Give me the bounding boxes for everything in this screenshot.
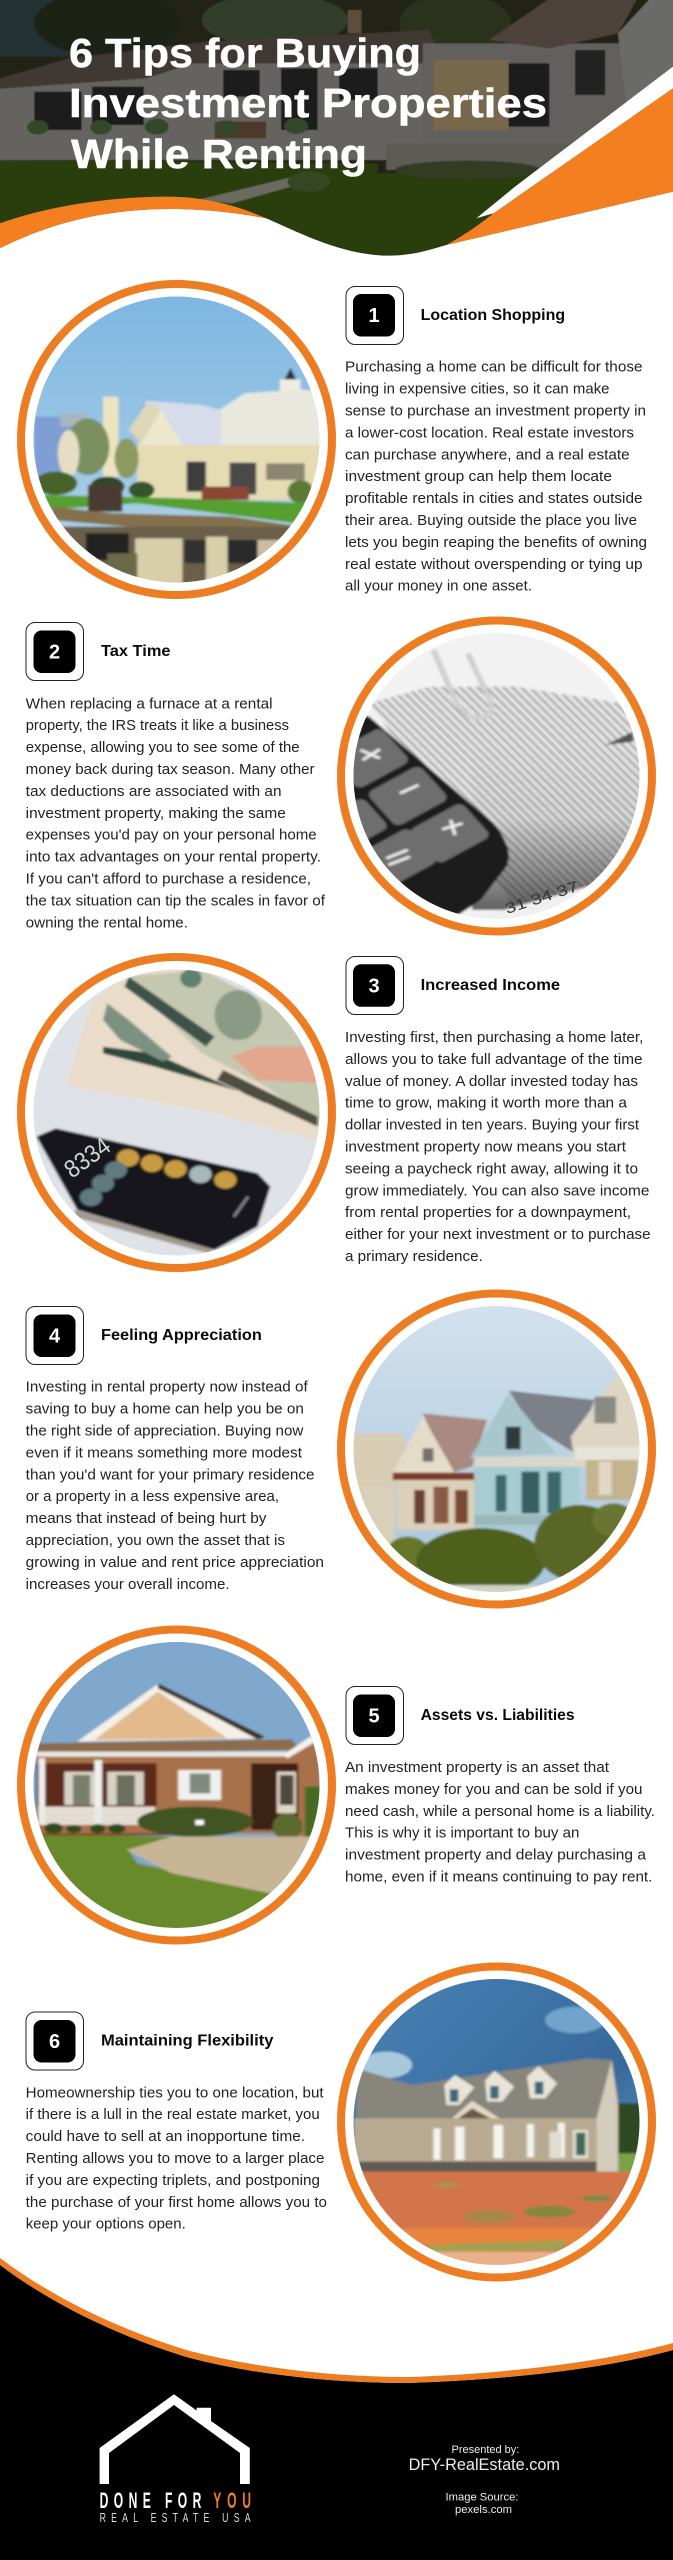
- paragraph: [345, 359, 647, 595]
- paragraph: investment property now means you start: [345, 1138, 627, 1156]
- paragraph: all your money in one asset.: [345, 578, 532, 595]
- heading: Assets vs. Liabilities: [421, 1707, 575, 1724]
- number badge 3: 3: [368, 976, 380, 998]
- header white wave: [0, 67, 673, 300]
- paragraph: means that instead of being hurt by: [26, 1510, 267, 1527]
- title: While Renting: [71, 131, 367, 177]
- title: [69, 30, 547, 177]
- paragraph: [26, 2084, 327, 2233]
- paragraph: seeing a paycheck right away, allowing it to: [345, 1160, 638, 1177]
- paragraph: This is why it is important to buy an: [345, 1825, 579, 1842]
- paragraph: home, even if it means continuing to pay rent.: [345, 1868, 652, 1886]
- title: 6 Tips for Buying: [69, 30, 421, 76]
- paragraph: dollar invested in ten years. Buying your first: [345, 1117, 640, 1134]
- orange footer curve: [0, 2258, 673, 2383]
- panel: tip 6 photo: [341, 1966, 652, 2278]
- paragraph: investment property, making the same: [26, 805, 286, 822]
- paragraph: if there is a lull in the real estate market, you: [26, 2106, 320, 2123]
- panel: tip 1 photo: [21, 284, 332, 595]
- paragraph: if you are expecting triplets, and postponing: [26, 2172, 320, 2189]
- footer credits: pexels.com: [455, 2504, 512, 2516]
- paragraph: into tax advantages on your rental property.: [26, 849, 321, 866]
- paragraph: sense to purchase an investment property in: [345, 402, 646, 420]
- paragraph: appreciation, you own the asset that is: [26, 1532, 285, 1549]
- paragraph: tax deductions are associated with an: [26, 783, 282, 800]
- footer credits: Image Source:: [446, 2492, 518, 2504]
- footer credits: DFY-RealEstate.com: [409, 2455, 560, 2474]
- heading: Maintaining Flexibility: [101, 2033, 274, 2050]
- paragraph: money back during tax season. Many other: [26, 761, 315, 778]
- panel: tip 6 text: [26, 2012, 327, 2233]
- number badge 4: [26, 1306, 84, 1364]
- paragraph: investment property and delay purchasing a: [345, 1847, 647, 1864]
- paragraph: saving to buy a home can help you be on: [26, 1401, 304, 1418]
- calculator digits in photo: 8334: [59, 1132, 116, 1184]
- number badge 6: 6: [49, 2031, 60, 2053]
- paragraph: the tax situation can tip the scales in favor of: [26, 892, 326, 909]
- paragraph: Investing in rental property now instead of: [26, 1379, 309, 1396]
- paragraph: could have to sell at an inopportune time.: [26, 2128, 305, 2145]
- paragraph: expenses you'd pay on your personal home: [26, 827, 317, 844]
- logo: Done For You Real Estate USA: DONE FOR: [100, 2488, 201, 2513]
- panel: tip 3 photo: [21, 957, 332, 1268]
- paragraph: real estate without overspending or tying up: [345, 556, 642, 573]
- paragraph: living in expensive cities, so it can make: [345, 381, 610, 398]
- paragraph: need cash, while a personal home is a liability.: [345, 1803, 655, 1820]
- paragraph: Investing first, then purchasing a home later,: [345, 1029, 643, 1046]
- heading: Feeling Appreciation: [101, 1327, 262, 1344]
- paragraph: expense, allowing you to see some of the: [26, 739, 300, 756]
- orange arc left: [0, 197, 266, 248]
- paragraph: growing in value and rent price appreciation: [26, 1554, 324, 1571]
- panel: tip 3 text: [345, 956, 651, 1265]
- panel: tip 5 text: [345, 1686, 655, 1886]
- paragraph: a lower-cost location. Real estate investors: [345, 424, 634, 441]
- paragraph: from rental properties for a downpayment,: [345, 1204, 631, 1221]
- heading: Increased Income: [421, 977, 560, 994]
- number badge 5: [346, 1686, 404, 1744]
- paragraph: If you can't afford to purchase a residence,: [26, 870, 311, 888]
- number badge 6: [26, 2012, 84, 2070]
- footer black wave: [0, 2258, 673, 2560]
- panel: tip 5 photo: [21, 1630, 332, 1940]
- paragraph: than you'd want for your primary residence: [26, 1466, 315, 1483]
- paragraph: profitable rentals in cities and states outside: [345, 490, 642, 507]
- number badge 3: [346, 956, 404, 1014]
- number badge 4: 4: [49, 1326, 61, 1348]
- paragraph: or a property in a less expensive area,: [26, 1488, 279, 1505]
- logo: Done For You Real Estate USA: [100, 2394, 251, 2525]
- paragraph: lets you begin reaping the benefits of owning: [345, 534, 647, 551]
- paragraph: [26, 695, 326, 931]
- logo: Done For You Real Estate USA: YOU: [213, 2488, 251, 2513]
- number badge 2: 2: [49, 642, 60, 664]
- heading: Location Shopping: [421, 307, 565, 324]
- number badge 1: [346, 286, 404, 344]
- icon: house outline: [100, 2394, 250, 2484]
- paragraph: [26, 1379, 324, 1593]
- number badge 2: [26, 622, 84, 680]
- paragraph: time to grow, making it worth more than a: [345, 1095, 628, 1112]
- paragraph: value of money. A dollar invested today has: [345, 1073, 638, 1090]
- panel: tip 2 photo: [327, 620, 652, 933]
- header photo: house with lawn: [0, 0, 673, 280]
- panel: tip 1 text: [345, 286, 647, 595]
- paragraph: the purchase of your first home allows you to: [26, 2194, 327, 2211]
- orange wedge right: [446, 88, 673, 245]
- paragraph: [345, 1029, 651, 1265]
- paragraph: [345, 1759, 655, 1886]
- paragraph: even if it means something more modest: [26, 1444, 303, 1461]
- paragraph: Renting allows you to move to a larger place: [26, 2150, 324, 2167]
- paragraph: their area. Buying outside the place you live: [345, 512, 637, 529]
- paragraph: grow immediately. You can also save income: [345, 1182, 649, 1199]
- number badge 1: 1: [368, 305, 380, 327]
- footer credits: Presented by:: [452, 2444, 519, 2456]
- paragraph: investment group can help them locate: [345, 468, 612, 485]
- axis numbers in photo: 31 34 37: [503, 878, 581, 918]
- white strip right: [476, 67, 673, 218]
- paragraph: can purchase anywhere, and a real estate: [345, 446, 630, 463]
- paragraph: When replacing a furnace at a rental: [26, 695, 273, 712]
- paragraph: property, the IRS treats it like a business: [26, 717, 289, 734]
- paragraph: owning the rental home.: [26, 914, 188, 931]
- logo: Done For You Real Estate USA: REAL ESTATE USA: [100, 2512, 251, 2525]
- paragraph: An investment property is an asset that: [345, 1759, 610, 1776]
- number badge 5: 5: [368, 1706, 380, 1728]
- footer credits: [409, 2444, 560, 2516]
- paragraph: a primary residence.: [345, 1248, 483, 1265]
- paragraph: either for your next investment or to purchase: [345, 1226, 651, 1243]
- panel: tip 4 photo: [341, 1294, 657, 1604]
- paragraph: allows you to take full advantage of the time: [345, 1051, 642, 1068]
- paragraph: Purchasing a home can be difficult for those: [345, 359, 642, 376]
- paragraph: increases your overall income.: [26, 1576, 230, 1593]
- paragraph: keep your options open.: [26, 2216, 186, 2233]
- panel: tip 4 text: [26, 1306, 324, 1593]
- paragraph: Homeownership ties you to one location, but: [26, 2084, 324, 2101]
- title: Investment Properties: [69, 80, 547, 126]
- heading: Tax Time: [101, 643, 171, 660]
- paragraph: makes money for you and can be sold if you: [345, 1781, 642, 1798]
- panel: tip 2 text: [26, 622, 326, 931]
- paragraph: the right side of appreciation. Buying now: [26, 1422, 304, 1440]
